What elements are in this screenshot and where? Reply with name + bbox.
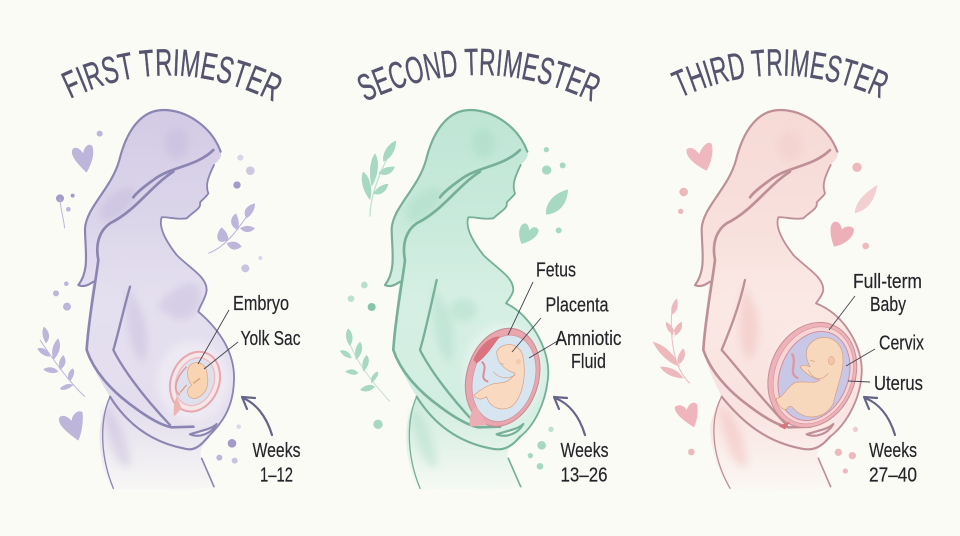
- label: baby: Baby: [870, 293, 907, 316]
- label: weeks: Weeks: [560, 439, 608, 462]
- figure: green silhouette: [385, 110, 548, 491]
- label: yolk sac: Yolk Sac: [240, 327, 300, 350]
- title: first trimester: FIRST TRIMESTER: [60, 49, 282, 102]
- decorations: dots, heart, leaves: [340, 141, 568, 470]
- label: embryo: Embryo: [233, 292, 289, 315]
- fetus: second trimester in womb: [454, 319, 551, 435]
- title: third trimester: THIRD TRIMESTER: [670, 49, 888, 98]
- label: week range: 1–12: [260, 464, 293, 486]
- label: weeks: Weeks: [869, 439, 917, 462]
- leader lines: [198, 310, 238, 369]
- label: week range: 13–26: [560, 464, 608, 486]
- title: second trimester: SECOND TRIMESTER: [358, 48, 600, 102]
- panel: first trimester: [38, 49, 300, 489]
- decorations: dots, hearts, leaves: [653, 143, 877, 474]
- arrow: [864, 397, 895, 435]
- fetus: full-term baby in womb: [753, 309, 872, 441]
- fetus: embryo in sac: [161, 344, 229, 419]
- figure: pink silhouette: [695, 110, 862, 491]
- label: amniotic: Amniotic: [556, 327, 622, 350]
- panel: second trimester: [340, 48, 622, 489]
- leader lines: [508, 282, 561, 358]
- leader lines: [829, 296, 875, 382]
- panel: third trimester: [652, 49, 925, 489]
- decorations: dots, hearts, leaves: [37, 131, 262, 464]
- label: fluid: Fluid: [571, 350, 606, 373]
- label: placenta: Placenta: [546, 294, 609, 316]
- label: cervix: Cervix: [879, 332, 925, 354]
- figure: purple silhouette: [78, 110, 234, 491]
- label: uterus: Uterus: [874, 372, 923, 395]
- label: week range: 27–40: [869, 464, 917, 486]
- label: fetus: Fetus: [536, 258, 576, 282]
- arrow: [242, 397, 272, 435]
- label: weeks 1-12: Weeks: [252, 439, 300, 462]
- label: full-term: Full-term: [853, 270, 922, 293]
- arrow: [554, 397, 585, 435]
